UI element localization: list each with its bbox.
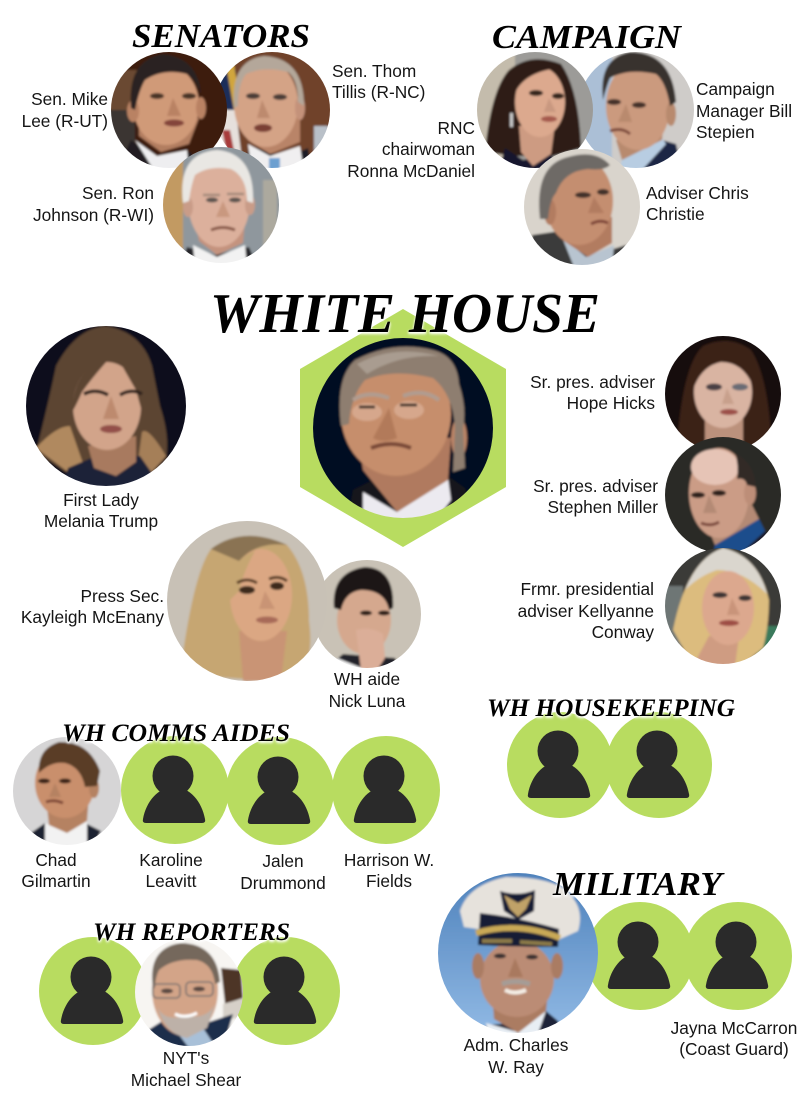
label: Harrison W. Fields: Fields: [366, 871, 412, 891]
portrait: Nick Luna: [318, 560, 421, 668]
label: Hope Hicks: Hope Hicks: [567, 393, 655, 413]
unnamed reporter icon: [232, 937, 340, 1045]
label: Jalen Drummond: Drummond: [240, 873, 326, 893]
label: Chad Gilmartin: Gilmartin: [21, 871, 91, 891]
section: senators: [22, 18, 425, 269]
label: Charles Ray: W. Ray: [488, 1057, 544, 1077]
portrait: Hope Hicks: [665, 336, 781, 444]
portrait: Melania Trump: [26, 326, 186, 486]
label: Kayleigh McEnany: Kayleigh McEnany: [21, 607, 164, 627]
unnamed staff icon: [606, 712, 712, 818]
unnamed staff icon: [226, 737, 334, 845]
label: Nick Luna: Nick Luna: [329, 691, 406, 711]
heading: WH housekeeping: WH HOUSEKEEPING: [487, 695, 735, 722]
label: Charles Ray: Adm. Charles: [464, 1035, 569, 1055]
heading: campaign: CAMPAIGN: [492, 19, 683, 56]
label: Melania Trump: First Lady: [63, 490, 139, 510]
portrait: Ronna McDaniel: [477, 52, 593, 168]
section: WH reporters: [39, 919, 340, 1090]
label: Ronna McDaniel: chairwoman: [382, 139, 475, 159]
label: Kellyanne Conway: Conway: [592, 622, 654, 642]
section: WH comms aides: [7, 720, 440, 893]
unnamed military icon: [586, 902, 694, 1010]
label: Ron Johnson: Sen. Ron: [82, 183, 154, 203]
hexagon badge: [300, 309, 506, 547]
label: Michael Shear: Michael Shear: [131, 1070, 241, 1090]
label: Michael Shear: NYT's: [163, 1048, 210, 1068]
heading: military: MILITARY: [552, 866, 725, 903]
portrait: Chad Gilmartin: [13, 737, 121, 845]
portrait: Kayleigh McEnany: [167, 521, 324, 681]
unnamed staff icon: [507, 712, 613, 818]
portrait: Michael Shear: [135, 938, 243, 1046]
label: Mike Lee: Sen. Mike: [31, 89, 108, 109]
portrait: Kellyanne Conway: [665, 548, 781, 664]
unnamed staff icon: [121, 736, 229, 844]
label: Chris Christie: Christie: [646, 204, 705, 224]
label: Thom Tillis: Tillis (R-NC): [332, 82, 425, 102]
portrait: Mike Lee: [111, 52, 227, 168]
label: Chris Christie: Adviser Chris: [646, 183, 749, 203]
section: WH housekeeping: [487, 695, 735, 818]
unnamed military icon: [684, 902, 792, 1010]
label: Stephen Miller: Sr. pres. adviser: [533, 476, 658, 496]
portrait: Charles Ray: [438, 873, 598, 1033]
label: Jalen Drummond: Jalen: [262, 851, 304, 871]
portrait: Thom Tillis: [220, 52, 330, 168]
label: Thom Tillis: Sen. Thom: [332, 61, 416, 81]
label: Nick Luna: WH aide: [334, 669, 400, 689]
section: military: [432, 866, 797, 1077]
portrait: Bill Stepien: [586, 52, 694, 168]
label: Melania Trump: Melania Trump: [44, 511, 158, 531]
label: Bill Stepien: Campaign: [696, 79, 775, 99]
label: Kellyanne Conway: adviser Kellyanne: [518, 601, 654, 621]
label: Ronna McDaniel: Ronna McDaniel: [347, 161, 475, 181]
label: Bill Stepien: Manager Bill: [696, 101, 792, 121]
label: Harrison W. Fields: Harrison W.: [344, 850, 434, 870]
label: Ron Johnson: Johnson (R-WI): [33, 205, 154, 225]
label: Hope Hicks: Sr. pres. adviser: [530, 372, 655, 392]
label: Karoline Leavitt: Karoline: [139, 850, 203, 870]
heading: WH reporters: WH REPORTERS: [93, 919, 290, 946]
label: Mike Lee: Lee (R-UT): [22, 111, 108, 131]
label: Jayna McCarron: Jayna McCarron: [671, 1018, 797, 1038]
heading: white house: WHITE HOUSE: [210, 283, 600, 345]
section: white house: [20, 283, 787, 711]
portrait: Donald Trump: [313, 338, 493, 518]
portrait: Stephen Miller: [665, 437, 781, 550]
portrait: Chris Christie: [524, 149, 640, 265]
heading: senators: SENATORS: [132, 18, 310, 55]
label: Chad Gilmartin: Chad: [35, 850, 77, 870]
unnamed staff icon: [332, 736, 440, 844]
label: Karoline Leavitt: Leavitt: [146, 871, 197, 891]
label: Kayleigh McEnany: Press Sec.: [80, 586, 164, 606]
label: Kellyanne Conway: Frmr. presidential: [520, 579, 654, 599]
label: Stephen Miller: Stephen Miller: [548, 497, 658, 517]
label: Bill Stepien: Stepien: [696, 122, 755, 142]
label: Ronna McDaniel: RNC: [438, 118, 475, 138]
section: campaign: [347, 19, 792, 271]
portrait: Ron Johnson: [163, 147, 279, 263]
label: Jayna McCarron: (Coast Guard): [679, 1039, 789, 1059]
unnamed reporter icon: [39, 937, 147, 1045]
heading: WH comms aides: WH COMMS AIDES: [62, 720, 290, 747]
